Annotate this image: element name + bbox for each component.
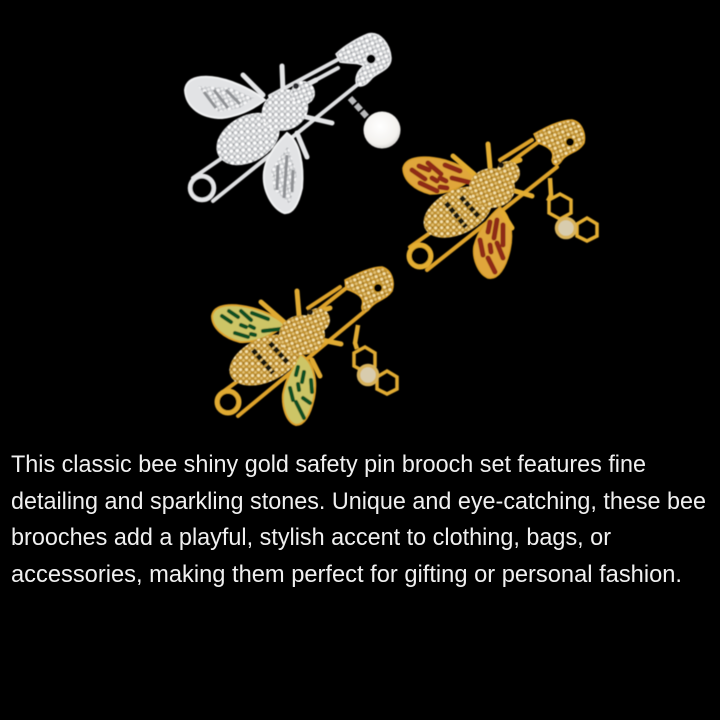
gold abdomen xyxy=(415,176,501,248)
silver lower wing xyxy=(264,133,302,213)
silver pin wires xyxy=(193,60,357,201)
gold pin ring xyxy=(409,245,431,267)
green brooch pin wires xyxy=(220,287,365,416)
gold honeycomb charm xyxy=(548,178,597,241)
gold pin head xyxy=(534,120,584,165)
gold legs and antenna xyxy=(453,144,532,228)
description text: accessories, making them perfect for gifting or personal fashion. xyxy=(11,561,682,588)
description text xyxy=(11,451,706,588)
silver abdomen xyxy=(207,102,289,176)
green brooch honeycomb charm xyxy=(354,325,397,394)
green brooch pin ring xyxy=(217,391,239,413)
silver legs and antenna xyxy=(243,66,332,157)
silver upper wing xyxy=(185,77,265,118)
green brooch abdomen xyxy=(221,324,309,396)
green brooch legs and antenna xyxy=(261,291,341,376)
description text: This classic bee shiny gold safety pin brooch set features fine xyxy=(11,451,646,478)
gold lower wing xyxy=(474,207,512,278)
brooch: silver bee with pearl xyxy=(185,34,400,213)
brooch: gold bee with red wings xyxy=(403,120,597,278)
silver pin ring xyxy=(190,176,214,200)
green lower wing xyxy=(283,354,315,425)
silver thorax xyxy=(255,82,315,138)
description text: brooches add a playful, stylish accent to clothing, bags, or xyxy=(11,524,611,551)
green brooch thorax xyxy=(279,315,325,355)
gold upper wing xyxy=(403,157,476,194)
gold head xyxy=(496,161,520,185)
description text: detailing and sparkling stones. Unique and eye-catching, these bee xyxy=(11,488,706,515)
green brooch head xyxy=(306,308,330,332)
gold pin wires xyxy=(410,140,557,270)
silver head xyxy=(291,81,315,105)
silver pin head xyxy=(336,34,391,86)
gold thorax xyxy=(469,168,515,208)
green brooch pin head xyxy=(345,267,393,312)
green upper wing xyxy=(212,305,285,342)
brooch: gold bee with green wings xyxy=(212,267,397,425)
silver pearl drop xyxy=(350,98,400,148)
